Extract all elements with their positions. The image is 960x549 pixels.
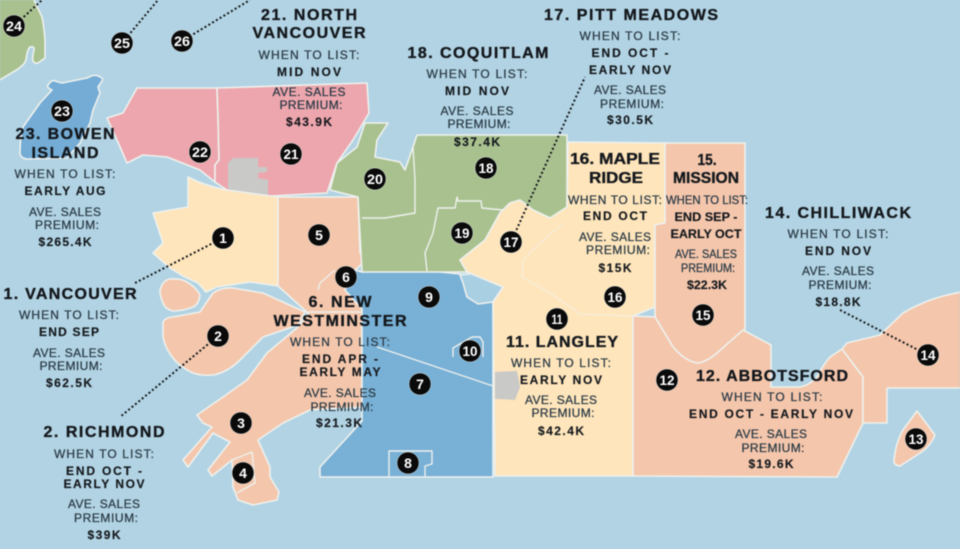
label: 18 Coquitlam: WHEN TO LIST: [426, 67, 528, 81]
label: 15 Mission: EARLY OCT [670, 227, 742, 241]
label: 14 Chilliwack: PREMIUM: [808, 278, 872, 292]
label: 16 Maple Ridge [568, 151, 662, 275]
region 13 [894, 411, 935, 466]
region 12 Abbotsford [633, 316, 863, 477]
label: 1 Vancouver [4, 286, 137, 390]
number markers: 6 [342, 269, 350, 285]
label: 14 Chilliwack [765, 205, 911, 309]
green inner boundaries [362, 147, 503, 271]
label: 6 New Westminster: EARLY MAY [300, 365, 380, 379]
grey area Surrey Langley [495, 371, 520, 400]
number markers: 15 [696, 307, 711, 323]
inner boundary Burnaby and New Westminster [318, 270, 335, 290]
label: 16 Maple Ridge: $15K [598, 261, 632, 275]
label: 11 Langley: $42.4K [538, 424, 584, 438]
label: 17 Pitt Meadows [544, 7, 718, 127]
label: 11 Langley: AVE. SALES [525, 393, 597, 407]
region 22 West Vancouver [107, 88, 219, 182]
inner boundary region 4 [232, 452, 255, 493]
number markers: 7 [416, 376, 424, 392]
label: 1 Vancouver: PREMIUM: [40, 359, 102, 373]
label: 15 Mission: $22.3K [687, 278, 727, 292]
number markers: 13 [908, 431, 924, 447]
label: 18 Coquitlam: PREMIUM: [448, 117, 510, 131]
label: 18 Coquitlam [408, 45, 548, 149]
label: 2 Richmond: PREMIUM: [74, 511, 138, 525]
dotted leader lines [14, 0, 928, 417]
number markers: 9 [425, 289, 433, 305]
number markers: 12 [660, 372, 675, 388]
label: 14 Chilliwack: 14. CHILLIWACK [765, 205, 911, 222]
label: 15 Mission: END SEP - [674, 210, 738, 224]
region 3 and 4 Delta [183, 312, 362, 505]
label: 15 Mission: AVE. SALES [675, 247, 737, 261]
label: 17 Pitt Meadows: $30.5K [607, 113, 653, 127]
label: 23 Bowen Island: EARLY AUG [24, 184, 106, 198]
number markers: 19 [454, 225, 470, 241]
label: 2 Richmond [44, 424, 164, 542]
number markers: 8 [404, 455, 412, 471]
region 10 outline [453, 337, 483, 357]
region 16 Maple Ridge, 17 Pitt Meadows, 11 Langley [460, 142, 665, 476]
region 15 Mission [655, 143, 745, 363]
label: 12 Abbotsford: AVE. SALES [735, 427, 807, 441]
number markers: 23 [54, 103, 70, 119]
boundary line in Surrey [377, 347, 493, 386]
number markers: 25 [114, 35, 130, 51]
region 5 Burnaby and 6 New Westminster [278, 197, 370, 313]
region 2 Richmond [163, 288, 305, 375]
number markers: 20 [367, 171, 383, 187]
label: 16 Maple Ridge: AVE. SALES [579, 230, 651, 244]
label: 15 Mission: WHEN TO LIST: [666, 193, 748, 207]
label: 23 Bowen Island: 23. BOWEN [16, 126, 114, 143]
label: 12 Abbotsford: END OCT - EARLY NOV [689, 407, 853, 421]
number markers: 2 [214, 328, 222, 344]
number markers: 26 [174, 33, 190, 49]
label: 11 Langley [506, 334, 618, 438]
grey area north shore [228, 158, 268, 195]
label: 1 Vancouver: WHEN TO LIST: [19, 308, 119, 322]
label: 6 New Westminster: WHEN TO LIST: [290, 335, 390, 349]
label: 2 Richmond: $39K [88, 528, 121, 542]
label: 12 Abbotsford: PREMIUM: [742, 441, 804, 455]
label: 6 New Westminster: PREMIUM: [310, 400, 374, 414]
number markers: 21 [284, 146, 299, 162]
label: 12 Abbotsford [689, 368, 853, 471]
label: 14 Chilliwack: END NOV [805, 244, 871, 258]
label: 18 Coquitlam: MID NOV [445, 84, 509, 98]
cream inner boundaries [522, 223, 633, 316]
label: 12 Abbotsford: WHEN TO LIST: [722, 390, 822, 404]
label: 14 Chilliwack: $18.8K [816, 295, 861, 309]
label: 23 Bowen Island [14, 126, 116, 249]
label: 6 New Westminster [274, 294, 407, 430]
label: 1 Vancouver: $62.5K [46, 376, 92, 390]
number markers: 24 [6, 18, 22, 34]
number markers: 10 [462, 343, 478, 359]
label: 12 Abbotsford: $19.6K [748, 457, 794, 471]
label: 2 Richmond: AVE. SALES [68, 497, 140, 511]
label: 11 Langley: PREMIUM: [532, 406, 594, 420]
label: 23 Bowen Island: AVE. SALES [29, 205, 101, 219]
label: 15 Mission [666, 152, 748, 292]
label: 2 Richmond: EARLY NOV [64, 477, 144, 491]
label: 23 Bowen Island: PREMIUM: [35, 218, 99, 232]
number markers: 14 [920, 347, 936, 363]
label: 23 Bowen Island: $265.4K [38, 235, 92, 249]
label: 21 North Vancouver: MID NOV [277, 65, 341, 79]
region 23 Bowen Island [20, 75, 102, 159]
label: 14 Chilliwack: WHEN TO LIST: [788, 227, 888, 241]
region 21 North Vancouver [215, 83, 369, 196]
label: 6 New Westminster: $21.3K [316, 416, 362, 430]
label: 6 New Westminster: WESTMINSTER [274, 313, 407, 330]
label: 17 Pitt Meadows: PREMIUM: [600, 97, 664, 111]
label: 6 New Westminster: AVE. SALES [304, 386, 376, 400]
region 7 to 10 Surrey [320, 270, 493, 477]
label: 2 Richmond: WHEN TO LIST: [54, 447, 154, 461]
label: 23 Bowen Island: ISLAND [32, 145, 98, 162]
label: 17 Pitt Meadows: WHEN TO LIST: [580, 29, 680, 43]
label: 1 Vancouver: 1. VANCOUVER [4, 286, 137, 303]
label: 16 Maple Ridge: END OCT [583, 209, 648, 223]
label: 16 Maple Ridge: 16. MAPLE [570, 151, 660, 168]
number markers: 5 [315, 227, 323, 243]
region 14 Chilliwack [842, 292, 960, 423]
number markers: 3 [237, 415, 245, 431]
label: 21 North Vancouver: $43.9K [286, 115, 332, 129]
label: 18 Coquitlam: $37.4K [454, 135, 500, 149]
label: 14 Chilliwack: AVE. SALES [802, 264, 874, 278]
label: 6 New Westminster: END APR - [302, 352, 378, 366]
number markers: 11 [552, 311, 563, 327]
label: 11 Langley: EARLY NOV [520, 373, 602, 387]
label: 2 Richmond: 2. RICHMOND [44, 424, 164, 441]
label: 17 Pitt Meadows: AVE. SALES [594, 83, 666, 97]
number markers: 4 [239, 465, 247, 481]
label: 17 Pitt Meadows: EARLY NOV [589, 63, 671, 77]
label: 23 Bowen Island: WHEN TO LIST: [14, 167, 116, 181]
label: 21 North Vancouver: WHEN TO LIST: [258, 48, 360, 62]
label: 2 Richmond: END OCT - [66, 464, 142, 478]
number markers: 22 [192, 144, 208, 160]
label: 15 Mission: PREMIUM: [681, 261, 735, 275]
number markers: 18 [478, 160, 494, 176]
region 2 Richmond: Sea Island [160, 279, 200, 311]
label: 16 Maple Ridge: WHEN TO LIST: [568, 193, 662, 207]
region 8 White Rock outline [389, 451, 432, 477]
region 24 [0, 0, 45, 81]
region 1 Vancouver [153, 177, 278, 292]
label: 17 Pitt Meadows: END OCT - [592, 46, 668, 60]
lake [460, 273, 503, 304]
label: 16 Maple Ridge: PREMIUM: [586, 243, 650, 257]
label: 18 Coquitlam: AVE. SALES [440, 104, 514, 118]
label: 21 North Vancouver: PREMIUM: [280, 98, 342, 112]
label: 21 North Vancouver: 21. NORTH [261, 7, 357, 24]
number markers: 16 [608, 289, 623, 305]
label: 21 North Vancouver [252, 7, 366, 129]
label: 1 Vancouver: END SEP [39, 325, 99, 339]
number markers: 1 [219, 230, 227, 246]
label: 11 Langley: 11. LANGLEY [506, 334, 618, 351]
label: 18 Coquitlam: 18. COQUITLAM [408, 45, 548, 62]
region 18 19 20 Tri-Cities [330, 123, 567, 272]
number markers: 17 [504, 234, 519, 250]
label: 11 Langley: WHEN TO LIST: [511, 356, 611, 370]
label: 21 North Vancouver: AVE. SALES [272, 85, 346, 99]
label: 15 Mission: 15. [698, 152, 716, 169]
label: 6 New Westminster: 6. NEW [308, 294, 372, 311]
label: 21 North Vancouver: VANCOUVER [252, 25, 366, 42]
label: 12 Abbotsford: 12. ABBOTSFORD [696, 368, 848, 385]
label: 16 Maple Ridge: RIDGE [589, 170, 643, 187]
label: 17 Pitt Meadows: 17. PITT MEADOWS [544, 7, 718, 24]
label: 1 Vancouver: AVE. SALES [33, 346, 105, 360]
label: 15 Mission: MISSION [673, 170, 739, 187]
